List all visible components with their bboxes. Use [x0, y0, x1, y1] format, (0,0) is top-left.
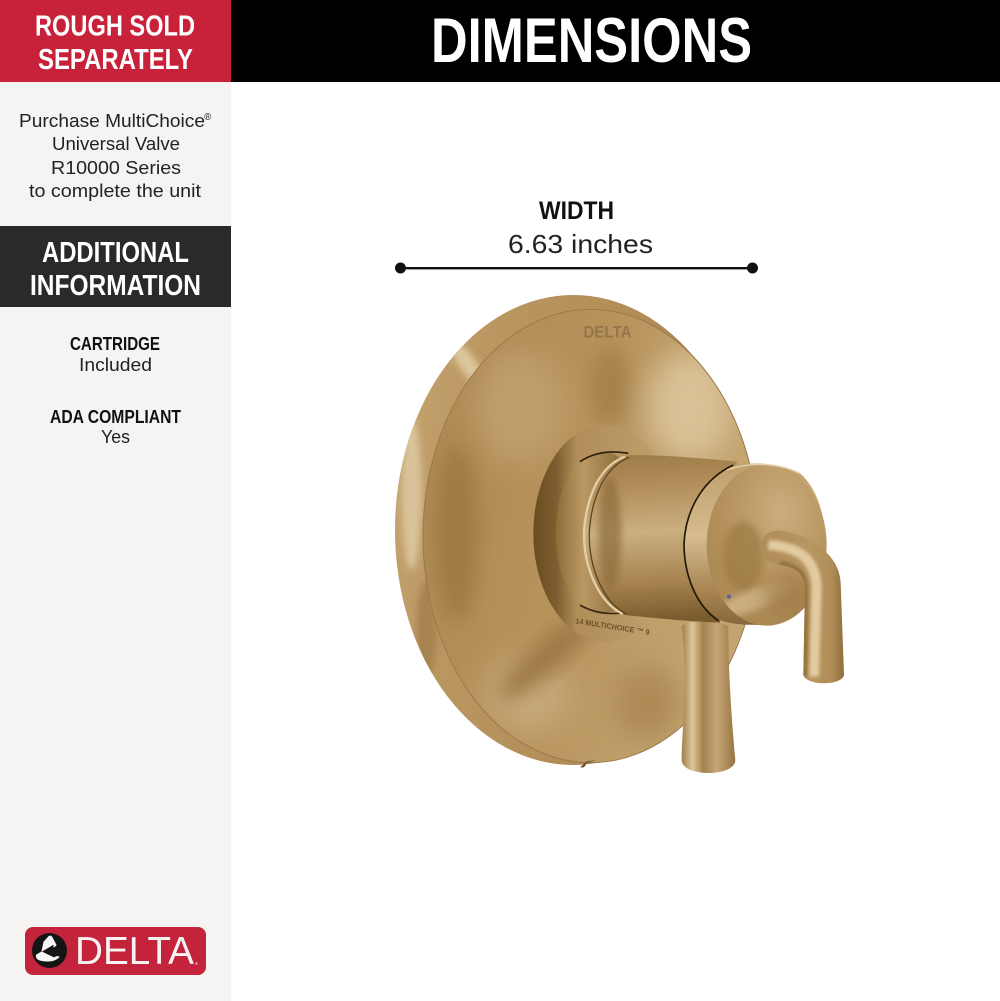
red banner: rough sold separately: [0, 0, 231, 82]
spec: cartridge: Included: [79, 355, 152, 375]
width label: [508, 197, 653, 259]
lower lever: [682, 622, 735, 773]
back plate rim: [395, 295, 694, 765]
width label: 6.63 inches: [508, 229, 653, 259]
brand logo: delta: DELTA: [75, 930, 194, 973]
text block: purchase note: [19, 111, 212, 201]
red banner: rough sold separately: SEPARATELY: [38, 44, 193, 76]
spec: ada compliant: Yes: [101, 427, 130, 447]
text block: purchase note: R10000 Series: [51, 158, 181, 178]
collar: [556, 451, 648, 614]
product image: valve trim: [395, 295, 844, 773]
control cap: [684, 463, 827, 626]
flange ring: 14 MULTICHOICE ™ 9: [575, 616, 650, 637]
width label: WIDTH: [539, 197, 614, 225]
upper lever: [761, 531, 844, 683]
brand logo: delta: ®: [195, 961, 198, 966]
spec: ada compliant: ADA COMPLIANT: [50, 407, 181, 427]
red banner: rough sold separately: ROUGH SOLD: [35, 10, 195, 42]
width dimension line: [395, 262, 758, 274]
text block: purchase note: Purchase MultiChoice: [19, 111, 205, 131]
spec: cartridge: [70, 334, 160, 375]
face plate: [423, 309, 758, 763]
dark banner: additional information: INFORMATION: [30, 270, 201, 302]
valve cylinder body: [584, 455, 737, 623]
dark banner: additional information: [0, 226, 231, 307]
sidebar panel background: [0, 0, 231, 1001]
brand logo: delta: [25, 927, 206, 975]
text block: purchase note: to complete the unit: [29, 181, 201, 201]
dark banner: additional information: ADDITIONAL: [42, 237, 189, 269]
text block: purchase note: Universal Valve: [52, 134, 180, 154]
title banner: dimensions: DIMENSIONS: [431, 6, 752, 76]
spec: ada compliant: [50, 407, 181, 447]
text block: purchase note: ®: [204, 112, 212, 123]
spec: cartridge: CARTRIDGE: [70, 334, 160, 354]
flange ring: [533, 425, 677, 642]
embossed brand mark: DELTA: [583, 322, 632, 341]
title banner: dimensions: [231, 0, 1000, 82]
small notch: [580, 760, 597, 767]
